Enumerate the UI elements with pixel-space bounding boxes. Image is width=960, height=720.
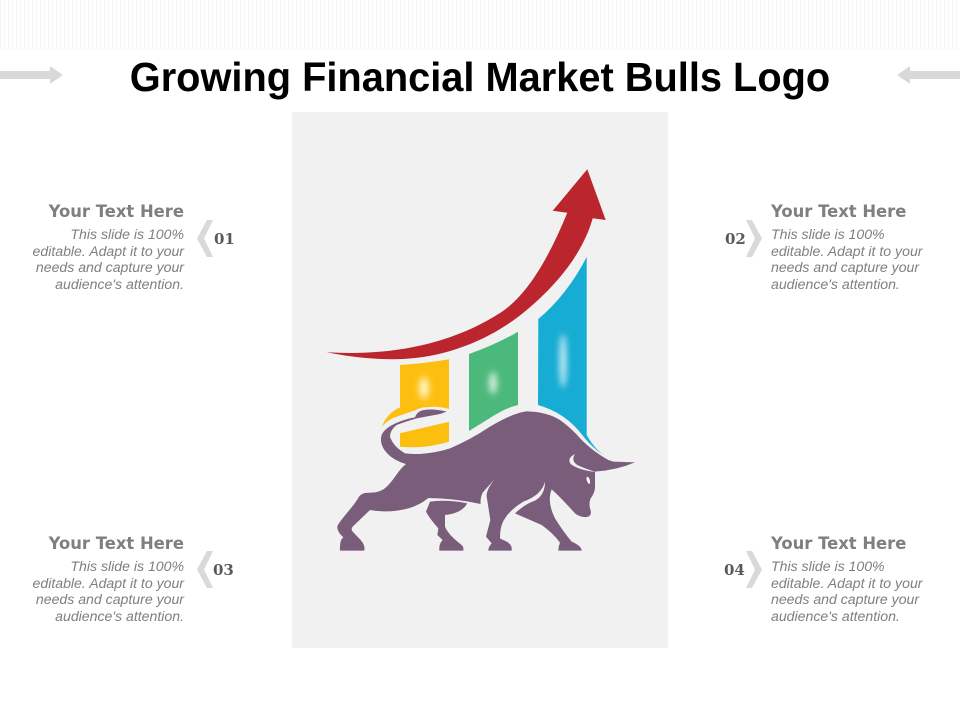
chevron 02 — [746, 220, 762, 257]
body 01: audience's attention. — [55, 276, 184, 292]
text block 03 — [33, 534, 184, 624]
number 01: 01 — [214, 230, 235, 248]
title: Growing Financial Market Bulls Logo — [130, 54, 830, 100]
body, tail, head and near legs — [337, 410, 635, 551]
arrow: left header arrow — [0, 66, 63, 84]
far hind leg — [426, 501, 467, 551]
body 04: This slide is 100% — [771, 558, 885, 574]
body 03: editable. Adapt it to your — [33, 575, 184, 591]
body 02: This slide is 100% — [771, 226, 885, 242]
number 02: 02 — [725, 230, 746, 248]
body 01: This slide is 100% — [70, 226, 184, 242]
heading 01: Your Text Here — [49, 202, 184, 221]
body 04: editable. Adapt it to your — [771, 575, 922, 591]
body 03: This slide is 100% — [70, 558, 184, 574]
heading 04: Your Text Here — [771, 534, 906, 553]
text block 02 — [770, 202, 923, 292]
panel: central logo background — [292, 112, 668, 648]
body 04 — [771, 558, 923, 624]
body 01: needs and capture your — [36, 259, 184, 275]
number 03: 03 — [213, 561, 234, 579]
body 01: editable. Adapt it to your — [33, 243, 184, 259]
arrow: red rising arrow — [327, 169, 606, 359]
body 01 — [33, 226, 184, 292]
eye — [586, 476, 591, 484]
text block 01 — [33, 202, 184, 292]
bull silhouette — [337, 410, 635, 551]
heading 02: Your Text Here — [771, 202, 906, 221]
bar: yellow — [382, 359, 449, 447]
arrow: right header arrow — [897, 66, 960, 84]
heading 03: Your Text Here — [49, 534, 184, 553]
chevron 04 — [746, 551, 762, 588]
bar: green — [469, 332, 518, 431]
text block 04 — [770, 534, 923, 624]
body 02: audience's attention. — [771, 276, 900, 292]
body 02: editable. Adapt it to your — [771, 243, 922, 259]
body 04: audience's attention. — [771, 608, 900, 624]
number 04: 04 — [724, 561, 745, 579]
body 03: audience's attention. — [55, 608, 184, 624]
body 02: needs and capture your — [771, 259, 919, 275]
body 03 — [33, 558, 184, 624]
body 04: needs and capture your — [771, 591, 919, 607]
bar: blue — [538, 257, 610, 459]
horn gap — [569, 454, 596, 472]
body 03: needs and capture your — [36, 591, 184, 607]
body 02 — [771, 226, 923, 292]
chevron 01 — [197, 220, 213, 257]
decorative top stripe band — [0, 0, 960, 50]
chevron 03 — [197, 551, 213, 588]
